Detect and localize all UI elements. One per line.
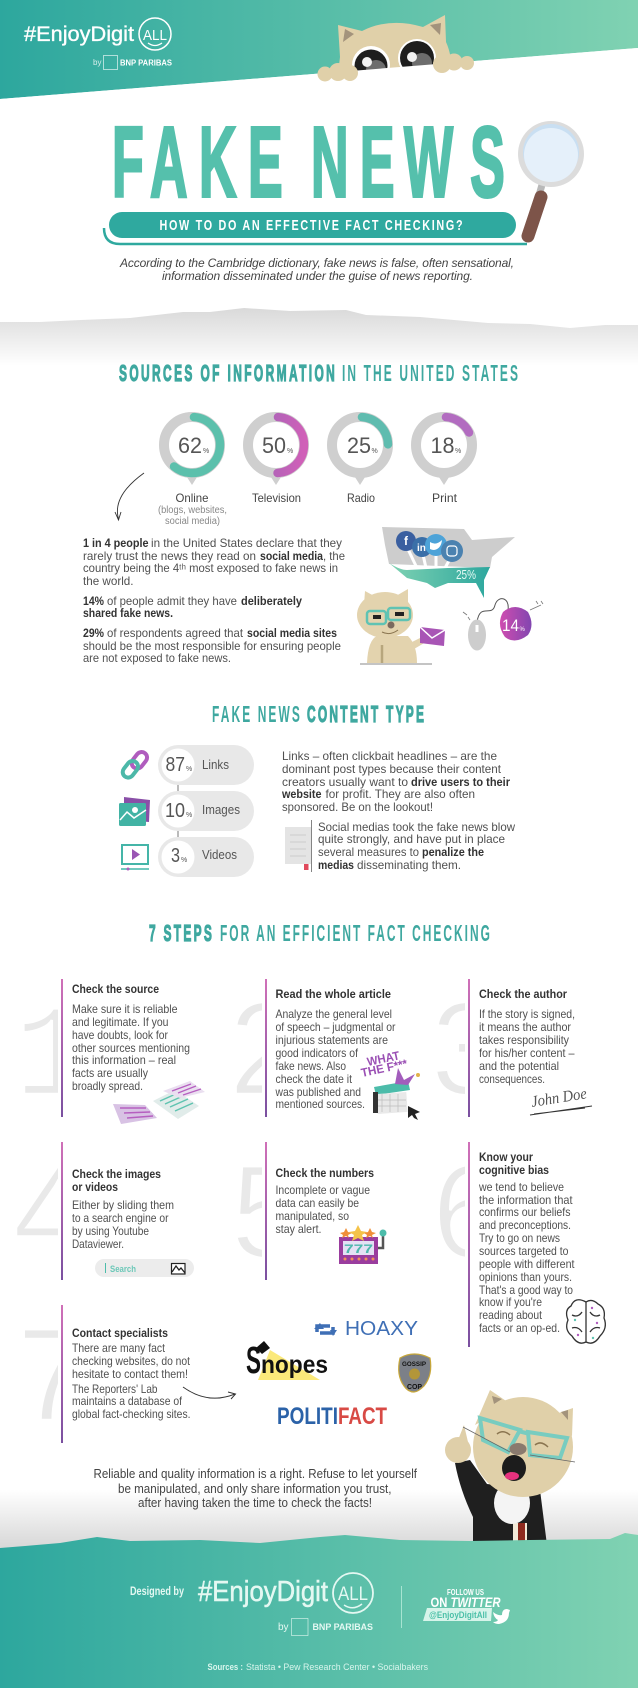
icon: slot machine: 777 xyxy=(344,1242,373,1256)
intro text: information disseminated under the guise of news reporting. xyxy=(162,269,473,283)
text: social media statistics xyxy=(83,537,345,665)
step 4: check the images or videos xyxy=(13,1138,194,1285)
step 7: contact specialists: checking websites, do not xyxy=(72,1355,191,1368)
donut: online 62%: 62 xyxy=(178,433,202,458)
donut: radio 25%: 25 xyxy=(347,433,371,458)
pill: images 10% xyxy=(158,791,254,831)
text: social media measures: Social medias took the fake news blow xyxy=(318,821,516,834)
step 6: know your cognitive bias: Try to go on news xyxy=(479,1232,560,1245)
header banner xyxy=(0,0,638,99)
step 2: read the whole article: fake news. Also xyxy=(276,1060,346,1073)
text: links explanation: sponsored. Be on the lookout! xyxy=(282,801,433,814)
step 6: know your cognitive bias: know if you're xyxy=(479,1296,542,1309)
step 6: know your cognitive bias: cognitive bias xyxy=(479,1164,549,1177)
text: links explanation: Links – often clickbait headlines – are the xyxy=(282,750,497,763)
signature: John Doe: John Doe xyxy=(530,1085,588,1111)
logo: PolitiFact: POLITI xyxy=(277,1403,338,1430)
step 7: contact specialists: hesitate to contact them! xyxy=(72,1368,188,1381)
step 4: check the images or videos: Dataviewer. xyxy=(72,1238,124,1251)
step 6: know your cognitive bias: we tend to believe xyxy=(478,1181,564,1194)
text: social media measures: several measures to xyxy=(318,846,419,859)
step 2: read the whole article: Analyze the general level xyxy=(276,1008,392,1021)
footer logo: ALL xyxy=(338,1584,368,1605)
subtitle banner: HOW TO DO AN EFFECTIVE FACT CHECKING? xyxy=(160,216,463,233)
heading: fake news content type: CONTENT TYPE xyxy=(307,701,424,727)
step 2: read the whole article: injurious statements are xyxy=(276,1034,388,1047)
title: FAKE NEWS xyxy=(112,106,505,218)
heading: 7 steps: 7 STEPS xyxy=(149,920,212,946)
step 1: check the source: facts are usually xyxy=(72,1067,148,1080)
illustration: computer mouse with 14% bomb: 14 xyxy=(502,616,519,635)
donut labels: social media) xyxy=(165,516,220,527)
donut labels: (blogs, websites, xyxy=(158,505,227,516)
arrow to text xyxy=(115,473,144,520)
logo: Hoaxy xyxy=(314,1318,418,1340)
illustration: computer mouse with 14% bomb: % xyxy=(520,627,526,633)
text: social media measures xyxy=(318,821,516,872)
step 3: check the author xyxy=(431,975,592,1122)
icon: april fools calendar: WHAT xyxy=(366,1048,402,1069)
step 6: know your cognitive bias: reading about xyxy=(479,1309,543,1322)
step 4: check the images or videos: or videos xyxy=(72,1181,118,1194)
step 1: check the source: Check the source xyxy=(72,983,159,996)
step 5: check the numbers: manipulated, so xyxy=(276,1210,349,1223)
icon: video player xyxy=(121,845,149,870)
text: links explanation: creators usually want to xyxy=(282,776,408,789)
heading: sources of information: IN THE UNITED STATES xyxy=(342,360,518,386)
step 3: check the author: 3 xyxy=(431,975,504,1122)
logo: Gossip Cop: GOSSIP xyxy=(402,1362,426,1368)
pill: videos 3%: Videos xyxy=(202,847,237,862)
step 6: know your cognitive bias: 6 xyxy=(432,1138,505,1285)
donut labels: Online xyxy=(176,491,209,505)
illustration: computer mouse with 14% bomb xyxy=(463,599,543,650)
search bar xyxy=(95,1259,194,1277)
intro text: According to the Cambridge dictionary, fake news is false, often sensational, xyxy=(119,256,514,270)
illustration: cat judge xyxy=(445,1390,575,1545)
donut: online 62% xyxy=(162,415,222,485)
pill: images 10%: % xyxy=(186,812,192,819)
pill: links 87%: Links xyxy=(202,757,229,772)
step 3: check the author: and the potential xyxy=(479,1060,559,1073)
step 7: contact specialists: maintains a database of xyxy=(72,1395,183,1408)
fade to footer xyxy=(0,1490,638,1550)
intro text xyxy=(119,256,514,283)
step 4: check the images or videos: by using Youtube xyxy=(72,1225,149,1238)
text: social media measures: disseminating them. xyxy=(357,859,461,872)
donut labels xyxy=(158,491,458,527)
step 7: contact specialists: Contact specialists xyxy=(72,1327,168,1340)
icon: slot machine xyxy=(339,1225,386,1264)
follow us on twitter: @EnjoyDigitAll xyxy=(429,1610,487,1620)
pill: videos 3% xyxy=(158,837,254,877)
step 4: check the images or videos: to a search engine or xyxy=(72,1212,169,1225)
heading: sources of information xyxy=(119,360,518,386)
closing statement xyxy=(94,1466,417,1510)
step 4: check the images or videos: Check the images xyxy=(72,1168,161,1181)
logo: EnjoyDigitAll by BNP Paribas xyxy=(24,18,173,70)
icon: magnifying glass xyxy=(518,121,584,236)
footer logo: by xyxy=(278,1622,289,1633)
step 1: check the source: other sources mentioning xyxy=(72,1042,190,1055)
step 5: check the numbers: stay alert. xyxy=(276,1223,322,1236)
white page xyxy=(0,48,638,360)
step 7: contact specialists: There are many fact xyxy=(72,1342,166,1355)
map of the United States with social icons: in xyxy=(417,543,426,554)
step 6: know your cognitive bias xyxy=(432,1138,605,1347)
footer xyxy=(0,1533,638,1688)
footer logo: Designed by xyxy=(130,1584,184,1598)
step 3: check the author: it means the author xyxy=(479,1021,571,1034)
text: social media statistics: of respondents agreed that xyxy=(107,627,244,640)
step 6: know your cognitive bias: and preconceptions. xyxy=(479,1219,571,1232)
step 6: know your cognitive bias: confirms our beliefs xyxy=(479,1206,571,1219)
text: social media statistics: are not exposed to fake news. xyxy=(83,652,231,665)
step 5: check the numbers: 5 xyxy=(231,1138,304,1285)
step 6: know your cognitive bias: opinions than yours. xyxy=(479,1271,572,1284)
text: social media measures: medias xyxy=(318,859,354,872)
text: links explanation: dominant post types because their content xyxy=(282,763,502,776)
text: links explanation: drive users to their xyxy=(411,776,510,789)
follow us on twitter: ON TWITTER xyxy=(430,1594,501,1610)
illustration: cat with glasses holding envelope xyxy=(357,589,445,664)
step 7: contact specialists: The Reporters' Lab xyxy=(72,1383,158,1396)
step 3: check the author: consequences. xyxy=(479,1073,545,1086)
step 7: contact specialists: global fact-checking sites. xyxy=(72,1408,190,1421)
footer logo xyxy=(130,1573,373,1636)
step 4: check the images or videos: Either by sliding them xyxy=(72,1199,174,1212)
icon: images xyxy=(119,797,150,826)
text: links explanation: website xyxy=(281,788,322,801)
pill: videos 3%: 3 xyxy=(171,845,180,867)
icon: chain link xyxy=(121,750,149,780)
text: social media statistics: should be the most responsible for ensuring people xyxy=(83,640,341,653)
follow us on twitter xyxy=(423,1588,510,1624)
logo: Snopes: nopes xyxy=(261,1351,328,1379)
text: social media statistics: social media sites xyxy=(247,627,337,640)
pill: links 87%: 87 xyxy=(166,754,185,776)
logo: EnjoyDigitAll by BNP Paribas: #EnjoyDigit xyxy=(24,23,134,46)
closing statement: be manipulated, and only share information you trust, xyxy=(118,1481,392,1496)
step 5: check the numbers xyxy=(238,1142,386,1280)
text: social media statistics: of people admit they have xyxy=(107,595,237,608)
logo: EnjoyDigitAll by BNP Paribas: by xyxy=(93,58,101,67)
donut: television 50%: 50 xyxy=(262,433,286,458)
step 2: read the whole article: was published and xyxy=(275,1086,361,1099)
pill: images 10%: Images xyxy=(202,802,240,817)
step 1: check the source: Make sure it is reliable xyxy=(72,1003,178,1016)
text: social media statistics: 14% xyxy=(83,595,104,608)
donut: online 62%: % xyxy=(203,448,209,455)
donut labels: Radio xyxy=(347,491,375,505)
donut: television 50% xyxy=(246,415,306,485)
text: social media statistics: deliberately xyxy=(241,595,303,608)
step 2: read the whole article: of speech – judgmental or xyxy=(276,1021,396,1034)
pill: videos 3%: % xyxy=(181,857,187,864)
torn paper band xyxy=(0,308,638,366)
logo: Snopes: S xyxy=(246,1340,261,1382)
closing statement: Reliable and quality information is a right. Refuse to let yourself xyxy=(94,1466,417,1481)
pill: links 87%: % xyxy=(186,766,192,773)
logo: EnjoyDigitAll by BNP Paribas: BNP PARIBAS xyxy=(120,58,173,68)
icon: april fools calendar: THE F*** xyxy=(360,1056,409,1080)
subtitle banner xyxy=(104,212,527,244)
sources: Statista • Pew Research Center • Socialbakers xyxy=(246,1662,428,1673)
step 2: read the whole article: good indicators of xyxy=(276,1047,359,1060)
step 2: read the whole article: Read the whole article xyxy=(276,988,392,1001)
icon: brain xyxy=(567,1300,605,1343)
text: social media statistics: rarely trust the news they read on xyxy=(83,550,256,563)
search bar: Search xyxy=(110,1264,136,1275)
step 2: read the whole article: mentioned sources. xyxy=(276,1098,365,1111)
step 1: check the source: and legitimate. If you xyxy=(72,1016,168,1029)
donut: print 18%: 18 xyxy=(430,433,454,458)
text: social media statistics: in the United States declare that they xyxy=(151,537,342,550)
icon: cat paws xyxy=(318,54,474,82)
text: social media measures: quite strongly, and have put in place xyxy=(318,833,505,846)
step 7: contact specialists xyxy=(25,1305,190,1443)
logo: Snopes xyxy=(246,1340,328,1382)
step 3: check the author: takes responsibility xyxy=(479,1034,569,1047)
map of the United States with social icons: 25% xyxy=(456,567,476,582)
sources: Sources : xyxy=(208,1662,243,1673)
step 6: know your cognitive bias: people with different xyxy=(479,1258,575,1271)
step 1: check the source: have doubts, look for xyxy=(72,1029,168,1042)
heading: sources of information: SOURCES OF INFORMATION xyxy=(119,360,335,386)
step 3: check the author: for his/her content – xyxy=(479,1047,575,1060)
text: social media statistics: social media xyxy=(260,550,323,563)
step 5: check the numbers: Incomplete or vague xyxy=(276,1184,370,1197)
step 1: check the source: broadly spread. xyxy=(72,1080,143,1093)
icon: april fools calendar xyxy=(360,1048,420,1120)
step 1: check the source xyxy=(24,979,205,1124)
logo: Gossip Cop xyxy=(399,1354,431,1392)
icon: document with bookmark xyxy=(285,820,312,872)
donut labels: Print xyxy=(432,491,458,505)
pill: images 10%: 10 xyxy=(165,800,185,822)
logo: EnjoyDigitAll by BNP Paribas: ALL xyxy=(143,27,167,44)
step 1: check the source: this information – real xyxy=(72,1054,176,1067)
text: social media statistics: 29% xyxy=(83,627,104,640)
footer divider xyxy=(400,1586,402,1628)
step 4: check the images or videos: 4 xyxy=(13,1138,86,1285)
arrow to fact checking sites xyxy=(183,1387,236,1399)
map of the United States with social icons xyxy=(382,527,515,598)
step 3: check the author: If the story is signed, xyxy=(479,1008,575,1021)
step 7: contact specialists: 7 xyxy=(17,1301,90,1448)
step 5: check the numbers: Check the numbers xyxy=(276,1167,374,1180)
text: social media statistics: shared fake news. xyxy=(83,607,173,620)
donut: radio 25% xyxy=(330,415,390,485)
step 2: read the whole article: check the date it xyxy=(276,1073,353,1086)
text: links explanation: for profit. They are also often xyxy=(326,788,475,801)
text: social media statistics: country being the 4ᵗʰ most exposed to fake news in xyxy=(83,562,338,575)
donut labels: Television xyxy=(252,491,301,505)
heading: fake news content type xyxy=(212,701,424,727)
text: social media measures: penalize the xyxy=(422,846,485,859)
map of the United States with social icons: f xyxy=(404,534,409,548)
footer logo: #EnjoyDigit xyxy=(198,1576,328,1608)
step 2: read the whole article xyxy=(229,975,420,1122)
step 6: know your cognitive bias: the information that xyxy=(479,1194,573,1207)
closing statement: after having taken the time to check the facts! xyxy=(138,1495,372,1510)
step 2: read the whole article: 2 xyxy=(229,975,302,1122)
heading: 7 steps: FOR AN EFFICIENT FACT CHECKING xyxy=(220,920,490,946)
donut: print 18%: % xyxy=(455,448,461,455)
donut: radio 25%: % xyxy=(372,448,378,455)
logo: Hoaxy: HOAXY xyxy=(345,1318,418,1340)
step 6: know your cognitive bias: facts or an op-ed. xyxy=(479,1322,560,1335)
donut: print 18% xyxy=(414,415,474,485)
footer logo: BNP PARIBAS xyxy=(312,1622,373,1633)
text: social media statistics: , the xyxy=(323,550,345,563)
text: social media statistics: 1 in 4 people xyxy=(83,537,149,550)
step 6: know your cognitive bias: Know your xyxy=(479,1151,533,1164)
follow us on twitter: FOLLOW US xyxy=(447,1588,485,1597)
step 1: check the source: 1 xyxy=(14,987,92,1134)
step 6: know your cognitive bias: That's a good way to xyxy=(479,1284,573,1297)
logo: PolitiFact: FACT xyxy=(338,1403,387,1430)
step 3: check the author: Check the author xyxy=(479,988,567,1001)
logo: Gossip Cop: COP xyxy=(407,1384,422,1391)
text: links explanation xyxy=(281,750,510,814)
icon: peeking cat head xyxy=(336,15,452,90)
step 5: check the numbers: data can easily be xyxy=(276,1197,359,1210)
text: social media statistics: the world. xyxy=(83,575,134,588)
donut: television 50%: % xyxy=(287,448,293,455)
heading: fake news content type: FAKE NEWS xyxy=(212,701,300,727)
pill: links 87% xyxy=(158,745,254,785)
step 6: know your cognitive bias: sources targeted to xyxy=(479,1245,568,1258)
icon: papers xyxy=(113,1081,205,1124)
content type connectors xyxy=(177,785,179,837)
